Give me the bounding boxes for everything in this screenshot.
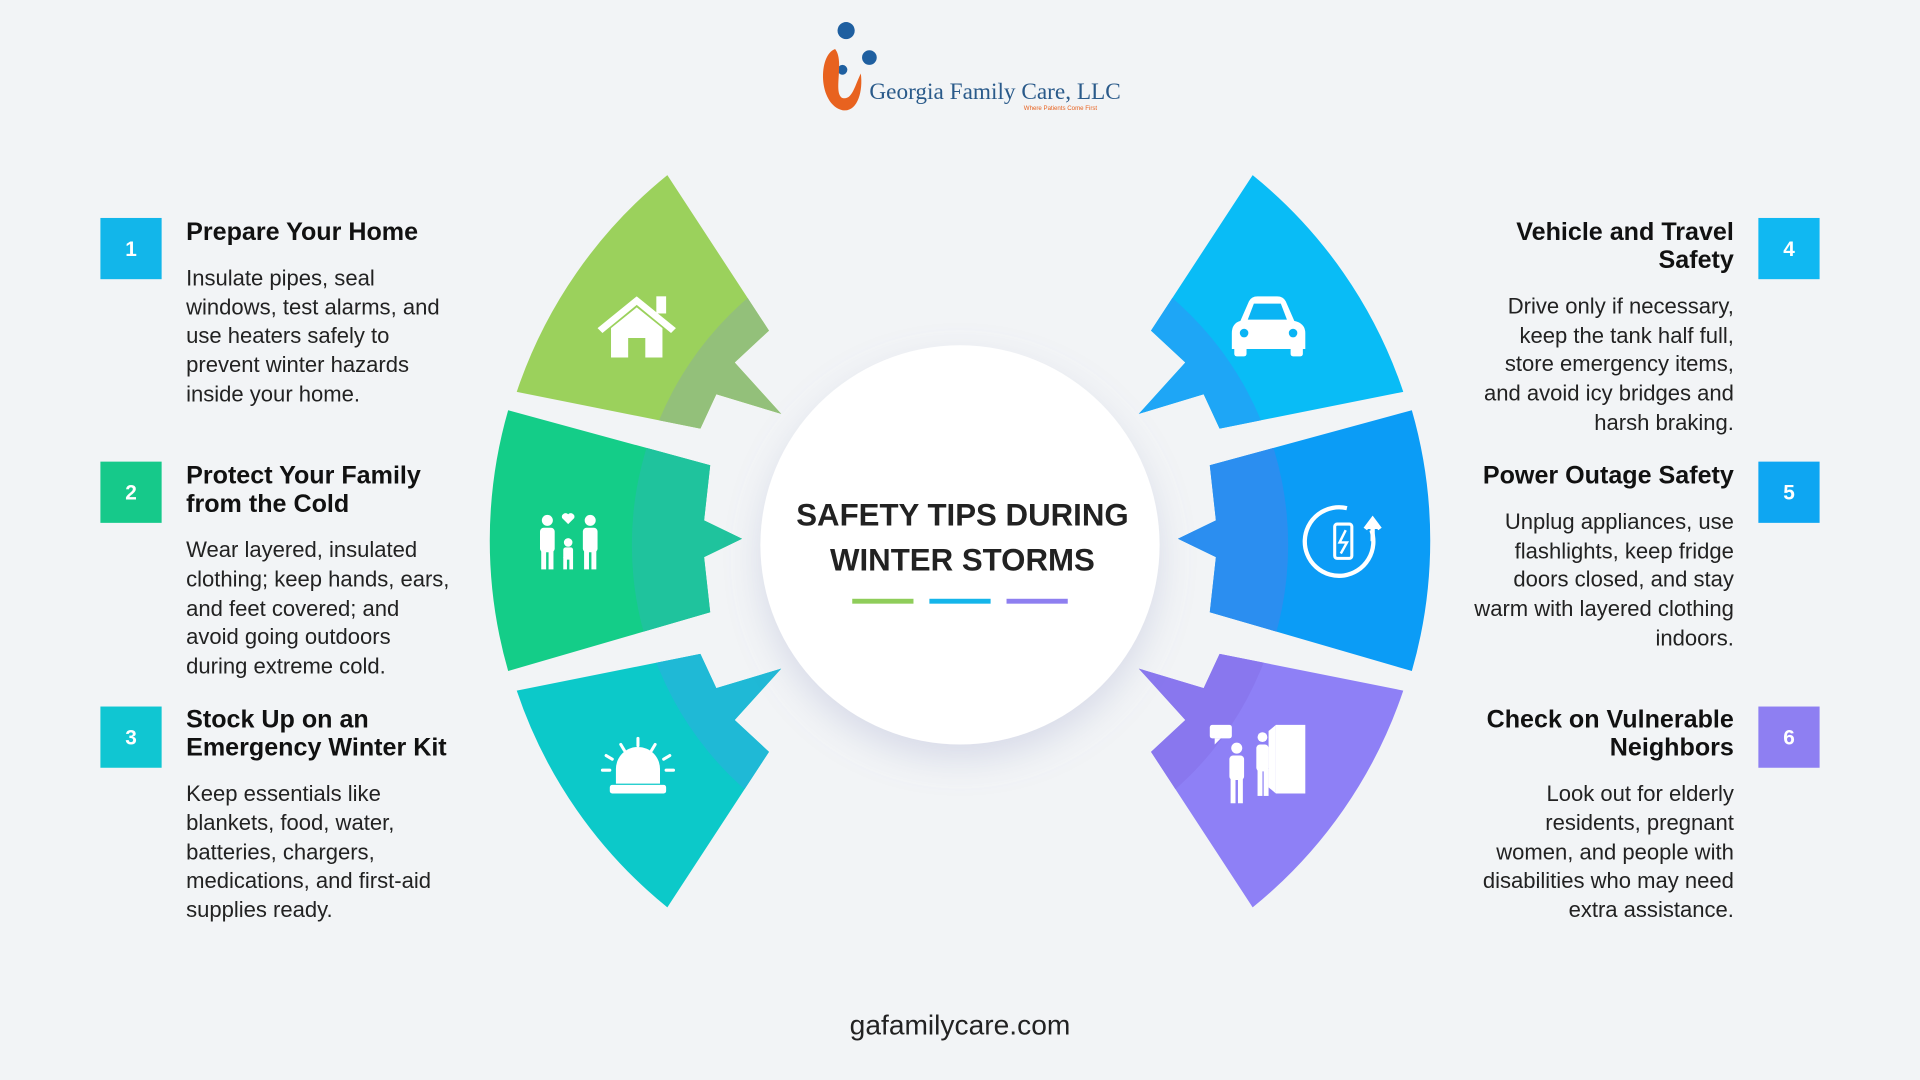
tip 2: and feet covered; and bbox=[186, 596, 399, 621]
icon: power bbox=[1305, 507, 1380, 576]
tip 2: clothing; keep hands, ears, bbox=[186, 567, 449, 592]
tip 5: warm with layered clothing bbox=[1473, 596, 1734, 621]
tip 6: women, and people with bbox=[1495, 840, 1734, 865]
tip 2: from the Cold bbox=[186, 490, 349, 518]
tip 3: Stock Up on an bbox=[186, 705, 369, 733]
tip 5: Power Outage Safety bbox=[1483, 462, 1734, 490]
icon: house bbox=[598, 296, 676, 358]
tip 3 bbox=[100, 705, 447, 922]
tip 6: extra assistance. bbox=[1569, 897, 1734, 922]
tip 2: during extreme cold. bbox=[186, 653, 386, 678]
tip 6: Check on Vulnerable bbox=[1487, 705, 1734, 733]
tip 6: disabilities who may need bbox=[1483, 868, 1734, 893]
petal 3: emergency kit bbox=[516, 654, 782, 908]
icon: neighbor at door bbox=[1210, 725, 1305, 803]
logo: Where Patients Come First bbox=[1024, 105, 1097, 112]
tip 4: and avoid icy bridges and bbox=[1484, 380, 1734, 405]
tip 4: 4 bbox=[1783, 238, 1795, 261]
tip 4: harsh braking. bbox=[1594, 410, 1734, 435]
logo bbox=[823, 22, 1121, 112]
tip 3: batteries, chargers, bbox=[186, 840, 375, 865]
center circle: WINTER STORMS bbox=[830, 543, 1095, 578]
tip 2 bbox=[100, 462, 449, 678]
tip 4: Drive only if necessary, bbox=[1508, 293, 1734, 318]
tip 3: Emergency Winter Kit bbox=[186, 734, 447, 762]
tip 5: 5 bbox=[1783, 482, 1795, 505]
icon: car bbox=[1232, 296, 1305, 356]
tip 2: 2 bbox=[125, 482, 137, 505]
logo: Georgia Family Care, LLC bbox=[869, 79, 1121, 105]
footer url: gafamilycare.com bbox=[850, 1010, 1070, 1041]
tip 3: Keep essentials like bbox=[186, 781, 381, 806]
petal 4: vehicle bbox=[1138, 175, 1404, 429]
tip 5 bbox=[1473, 462, 1820, 650]
tip 4: Vehicle and Travel bbox=[1516, 218, 1734, 246]
tip 1 bbox=[100, 218, 440, 407]
tip 3: blankets, food, water, bbox=[186, 810, 394, 835]
tip 6 bbox=[1483, 705, 1820, 922]
tip 1: 1 bbox=[125, 238, 137, 261]
tip 3: supplies ready. bbox=[186, 897, 333, 922]
tip 1: use heaters safely to bbox=[186, 323, 389, 348]
tip 1: prevent winter hazards bbox=[186, 352, 409, 377]
petal 5: power outage bbox=[1178, 410, 1430, 671]
tip 2: Wear layered, insulated bbox=[186, 537, 417, 562]
tip 2: avoid going outdoors bbox=[186, 624, 391, 649]
tip 1: Insulate pipes, seal bbox=[186, 265, 375, 290]
tip 6: residents, pregnant bbox=[1545, 810, 1734, 835]
icon: family bbox=[540, 513, 598, 569]
tip 3: 3 bbox=[125, 726, 137, 749]
tip 1: windows, test alarms, and bbox=[185, 295, 440, 320]
petal 1: prepare home bbox=[516, 175, 782, 429]
petal 2: protect family bbox=[490, 410, 742, 671]
tip 4: store emergency items, bbox=[1505, 351, 1734, 376]
petal 6: neighbors bbox=[1138, 654, 1404, 908]
icon: alarm bbox=[602, 738, 673, 793]
tip 5: Unplug appliances, use bbox=[1505, 509, 1734, 534]
center circle bbox=[760, 345, 1160, 744]
title: SAFETY TIPS DURING bbox=[796, 497, 1129, 532]
tip 2: Protect Your Family bbox=[186, 462, 421, 490]
tip 1: Prepare Your Home bbox=[186, 218, 418, 246]
tip 1: inside your home. bbox=[186, 382, 360, 407]
tip 6: 6 bbox=[1783, 726, 1795, 749]
tip 4: keep the tank half full, bbox=[1520, 323, 1734, 348]
tip 5: doors closed, and stay bbox=[1513, 567, 1734, 592]
tip 6: Look out for elderly bbox=[1547, 781, 1734, 806]
tip 3: medications, and first-aid bbox=[186, 868, 431, 893]
tip 6: Neighbors bbox=[1610, 734, 1734, 762]
tip 5: flashlights, keep fridge bbox=[1515, 538, 1734, 563]
tip 4 bbox=[1484, 218, 1820, 435]
tip 5: indoors. bbox=[1655, 625, 1734, 650]
tip 4: Safety bbox=[1659, 246, 1734, 274]
